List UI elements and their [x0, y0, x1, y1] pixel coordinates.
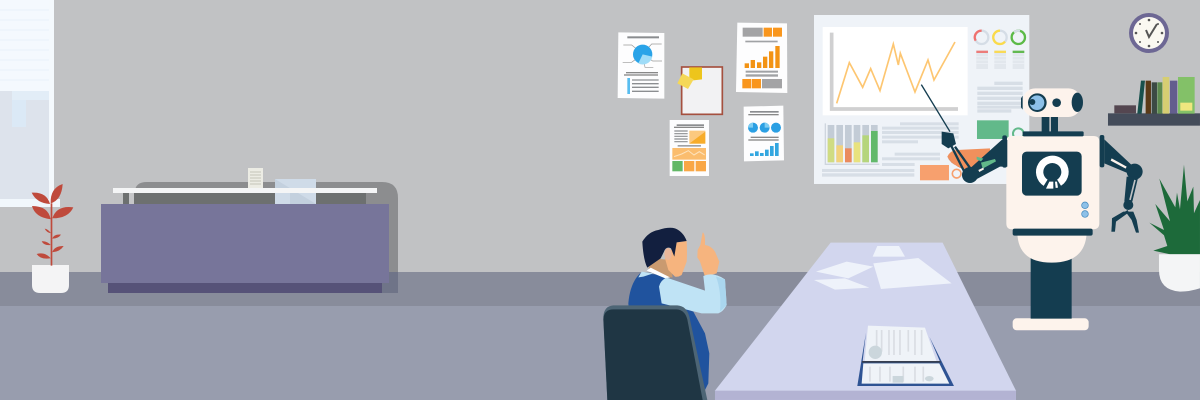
line chart: [823, 27, 968, 115]
floor: [0, 306, 1200, 400]
buttons: [1082, 202, 1088, 209]
desk front: [101, 204, 389, 283]
green ring: [1013, 128, 1024, 139]
floor skirting band: [0, 272, 1200, 306]
collar: [647, 268, 670, 278]
upper arm: [970, 140, 1007, 180]
open folder with documents: [857, 326, 954, 386]
scattered papers: [814, 246, 952, 290]
base: [1013, 318, 1089, 330]
table: [715, 243, 1016, 400]
wall: [0, 0, 1200, 272]
document: blue bars: [744, 106, 784, 161]
orange ring: [952, 169, 961, 178]
hip: [1017, 233, 1087, 263]
document: orange report: [670, 120, 709, 176]
plant: red leaves: [32, 184, 73, 293]
torso: [1006, 136, 1099, 229]
businessman: [603, 228, 727, 400]
body: [628, 273, 709, 400]
orange hand shape: [947, 148, 990, 170]
window: [0, 0, 60, 207]
shirt arm: [659, 274, 727, 313]
orange block: [920, 165, 949, 180]
hair: [642, 228, 687, 268]
bookshelf: [1108, 77, 1200, 126]
stacked bars: [825, 123, 879, 164]
chest screen: [1022, 152, 1082, 196]
document: orange bars: [736, 23, 787, 93]
pedestal: [1031, 257, 1072, 319]
ear: [664, 248, 672, 260]
neck: [1042, 115, 1049, 133]
wall documents: [618, 23, 787, 176]
gripper: [942, 132, 956, 148]
desk shadow: [135, 182, 398, 293]
neck: [648, 258, 673, 277]
small tables: [976, 51, 1024, 69]
document on counter: [248, 168, 263, 189]
potted plant: green: [1149, 165, 1200, 292]
presentation board: [814, 15, 1029, 184]
document: pie chart: [618, 32, 664, 99]
pointer stick: [921, 85, 950, 132]
donut charts: [975, 31, 1025, 44]
glass panel: [275, 179, 316, 204]
text lines bottom: [822, 122, 959, 177]
wall clock: [1129, 13, 1169, 53]
counter top: [113, 188, 377, 193]
hand: [697, 232, 719, 277]
green block: [977, 120, 1009, 139]
left arm with pointer: [921, 85, 1007, 183]
robot: [1006, 88, 1143, 330]
corkboard with sticky notes: [677, 67, 722, 114]
face: [665, 241, 687, 277]
right arm with claw: [1100, 135, 1143, 233]
reception desk: [101, 168, 398, 293]
chair: [603, 305, 707, 400]
text lines right: [977, 82, 1023, 113]
head: [1023, 88, 1081, 117]
